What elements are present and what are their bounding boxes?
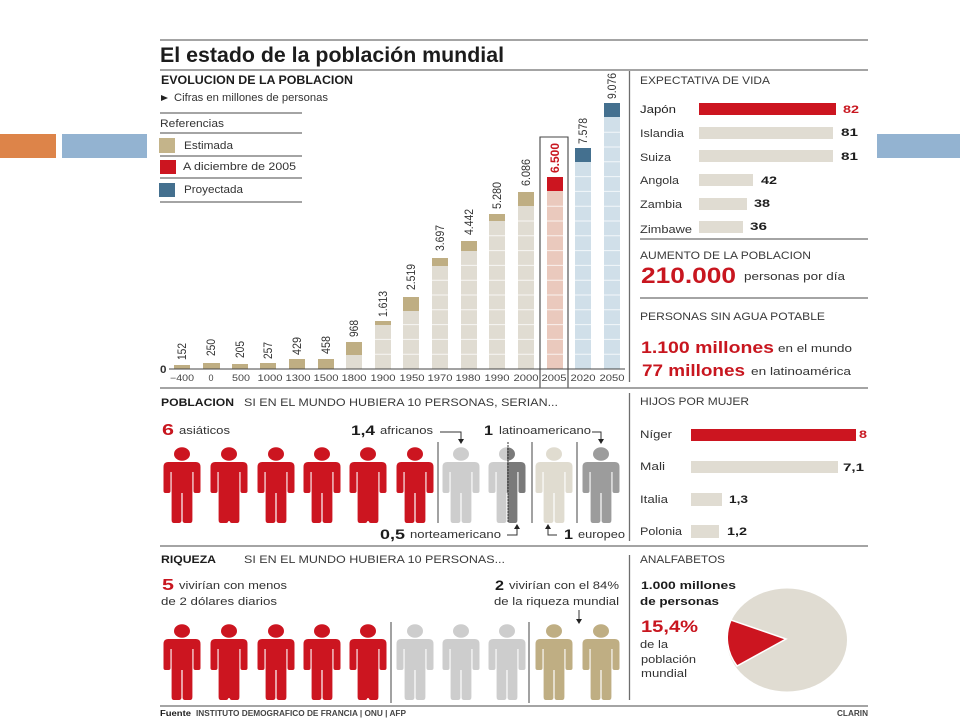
label: five poorest: de 2 dólares diarios [161,596,278,608]
panel: world of ten people: europeo [578,529,625,541]
year labels: −400 [170,373,194,383]
label: five poorest: vivirían con menos [179,580,288,592]
slide decoration: right blue stripe [877,134,960,158]
row: Japón: 82 [843,104,859,116]
row: Angola: Angola [640,175,680,187]
value labels: 250 [204,339,218,356]
year labels: 2000 [514,373,538,383]
heading: children per woman: HIJOS POR MUJER [640,396,749,408]
arrow: africans [440,432,461,439]
value labels [175,73,619,360]
arrow: two richest [578,610,580,620]
value labels: 6.500 [548,143,562,173]
row: Suiza: Suiza [640,152,672,164]
panel: world of ten people: africanos [380,425,434,437]
row: Italia: Italia [640,494,669,506]
subheading: wealth: SI EN EL MUNDO HUBIERA 10 PERSONAS... [244,554,505,566]
stat: Latin America: 77 millones [642,361,745,380]
pie chart [727,588,847,692]
year labels: 1800 [342,373,366,383]
label: asians: 6 [162,422,174,439]
year labels: 1500 [314,373,338,383]
panel: world of ten people: asiáticos [179,425,231,437]
panel: world of ten people: latinoamericano [499,425,591,437]
stat: people: 1.000 millones [641,580,736,592]
panel: population increase [640,250,846,288]
title: El estado de la población mundial [160,44,504,67]
row: Zambia: 38 [754,198,770,210]
arrow: north american [507,528,517,535]
stat caption: población [641,654,696,666]
legend: Estimada [184,140,234,152]
legend: A diciembre de 2005 [183,161,296,173]
year labels: 1970 [428,373,452,383]
year labels: 1950 [400,373,424,383]
value labels: 152 [175,343,189,360]
bar chart: world population [160,73,625,388]
slide decoration: orange stripe [0,134,56,158]
credit: CLARIN [837,709,868,718]
year labels: 2020 [570,373,596,383]
year labels: 1900 [370,373,396,383]
value labels: 1.613 [376,291,390,317]
axis [169,368,625,370]
heading: population increase: AUMENTO DE LA POBLACION [640,250,811,262]
value labels: 9.076 [605,73,619,99]
year labels: 2005 [542,373,566,383]
label: two richest: vivirían con el 84% [509,580,619,592]
stat caption [640,639,696,680]
panel: illiteracy [640,554,847,692]
row: Japón [640,103,859,116]
value labels: 3.697 [433,225,447,251]
source note: INSTITUTO DEMOGRAFICO DE FRANCIA | ONU | AFP [196,709,407,718]
panel: no drinking water: en el mundo [778,343,852,355]
heading: population: POBLACION [161,397,234,409]
value labels: 257 [261,342,275,359]
row: Islandia: Islandia [640,128,685,140]
value labels: 458 [319,336,333,354]
row: Zambia [640,198,770,211]
subheading: population: SI EN EL MUNDO HUBIERA 10 PERSONAS, SERIAN... [244,397,558,409]
icon: pointer triangle [161,95,168,101]
row: Níger [640,429,867,441]
panel: no drinking water: en latinoamérica [751,366,852,378]
row: Angola: 42 [761,175,777,187]
heading: wealth: RIQUEZA [161,554,216,566]
highlight box: 2005 [540,137,568,388]
bars [174,103,620,369]
row: Suiza: 81 [841,151,858,163]
value labels: 968 [347,320,361,337]
label: five poorest [161,577,288,608]
row: Polonia: 1,2 [727,526,747,538]
stat: percent: 15,4% [641,617,698,636]
value labels: 205 [233,341,247,358]
value labels: 429 [290,337,304,355]
panel: children per woman [640,396,867,538]
value labels: 7.578 [576,118,590,144]
source note: Fuente [160,709,192,718]
label: five poorest: 5 [162,577,174,594]
label: two richest: 2 [495,577,504,593]
year labels: 1990 [484,373,510,383]
row: Mali: Mali [640,461,665,473]
arrow: latin american [592,432,601,439]
legend: Proyectada [184,184,244,196]
row: Islandia: 81 [841,127,858,139]
row: Níger: Níger [640,429,672,441]
row: Italia: 1,3 [729,494,748,506]
row: Zambia: Zambia [640,199,683,211]
year labels: 2050 [600,373,624,383]
heading: evolution: EVOLUCION DE LA POBLACION [161,75,353,87]
legend: Referencias [160,118,225,130]
axis zero: 0 [160,364,166,376]
panel: population evolution [159,73,625,388]
label: european: 1 [564,526,573,542]
stat caption: personas por día [744,271,846,283]
row: Níger: 8 [859,429,867,441]
value labels: 5.280 [490,182,504,209]
year labels [170,373,624,383]
pictogram: ten people by wealth [164,622,620,703]
row: Mali: 7,1 [843,462,864,474]
label: africans: 1,4 [351,422,375,438]
panel: world of ten people [161,397,625,542]
year labels: 1980 [456,373,480,383]
panel: wealth [161,554,620,703]
year labels: 0 [208,373,214,383]
label: north american: 0,5 [380,526,405,542]
panel: no drinking water [640,311,852,380]
slide decoration: left blue stripe [62,134,147,158]
row: Angola [640,174,777,187]
panel: illiteracy: de personas [640,596,719,608]
row: Suiza [640,150,858,164]
note: units: Cifras en millones de personas [174,92,328,104]
heading: life expectancy: EXPECTATIVA DE VIDA [640,75,771,87]
pictogram: ten people by region [164,442,620,523]
label: latin american: 1 [484,422,493,438]
row: Italia [640,493,748,506]
stat: 210.000: 210.000 [641,263,736,288]
value labels: 6.086 [519,159,533,186]
row: Zimbawe: 36 [750,221,767,233]
row: Mali [640,461,864,474]
row: Zimbawe [640,221,767,236]
arrow: european [548,528,557,535]
stat caption: de la [640,639,669,651]
label: two richest: de la riqueza mundial [494,596,619,608]
row: Japón: Japón [640,104,676,116]
row: Zimbawe: Zimbawe [640,224,692,236]
label: two richest [494,577,619,608]
row: Islandia [640,127,858,140]
heading: no drinking water: PERSONAS SIN AGUA POTABLE [640,311,825,323]
panel: life expectancy [640,75,859,236]
year labels: 500 [232,373,250,383]
value labels: 4.442 [462,209,476,235]
year labels: 1300 [286,373,310,383]
legend [159,113,302,202]
row: Polonia [640,525,747,538]
row: Polonia: Polonia [640,526,683,538]
stat: world: 1.100 millones [641,338,774,357]
value labels: 2.519 [404,264,418,290]
heading: illiteracy: ANALFABETOS [640,554,725,566]
stat caption: mundial [641,668,687,680]
panel: world of ten people: norteamericano [410,529,501,541]
year labels: 1000 [258,373,282,383]
